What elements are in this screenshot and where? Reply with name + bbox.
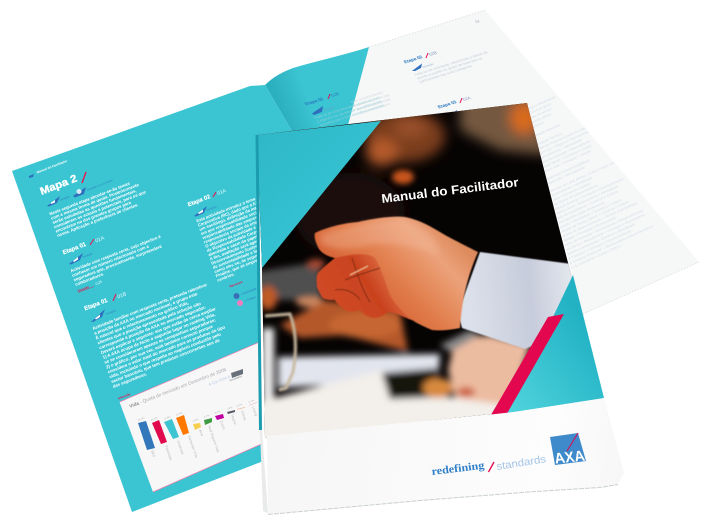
text block: step body continuing on white page: com os participantes	[350, 91, 384, 104]
logo: AXA	[550, 433, 586, 467]
text block: right column list on white page: Seguros Vida + Formação + Gestão	[540, 149, 592, 175]
text block: Etapa 01 01B body: vida, incluindo o que respeita ao negócio conduzido pelo	[109, 332, 222, 379]
heading: Etapa 02 01A: Etapa 02	[187, 194, 211, 208]
heading: Etapa 01 01B	[84, 291, 128, 322]
panel: cover shadow edge	[260, 430, 270, 514]
text block: right column list on white page: + Técnica Sénior	[527, 112, 552, 126]
resource icons	[229, 280, 257, 306]
text block: Etapa 02 01A body: Esta actividade introduz o tema da Etapa 01	[196, 187, 279, 223]
text block: step body continuing on white page: fundamentais de cada	[356, 97, 392, 111]
text block: Etapa 01 01B body: 1) A AXA ocupa de facto o segundo lugar no ranking Vida,	[102, 312, 216, 360]
resource icons: Recursos	[229, 280, 243, 288]
heading: Mapa 2: Mapa 2	[39, 173, 79, 198]
text block: Etapa 01 01B body: sector bancário, que tem produtos concorrentes aos da	[110, 337, 221, 384]
white base band	[267, 398, 624, 514]
text block: Etapa 02 01A body	[196, 187, 300, 283]
text block: right column list on white page: AXA "Universo" + Formação e Desenvolvimento	[564, 229, 632, 263]
cover bottom edge	[268, 484, 618, 514]
text block: Etapa 02 01A body: Desenvolvimento Sustentável	[211, 240, 267, 266]
page number: 12	[474, 19, 480, 24]
text block: right column list on white page: Gestão de Investimento + Comércio e Cultura	[553, 190, 618, 222]
heading: Etapa 01 01B: Duração	[105, 308, 117, 316]
red diagonal stripe	[491, 314, 564, 415]
text block: Etapa 01 01B body: Deverá explicar a seguinte: aos que estão de cerca ampliar	[100, 306, 217, 355]
teal triangle lower right	[507, 275, 604, 413]
tagline: redefining standards: standards	[496, 453, 547, 473]
step heading: Etapa 03 02A on white page: Etapa 03	[437, 99, 458, 109]
chart note: A Cor AXA é	[208, 374, 231, 387]
bar labels: Santander Vida	[187, 435, 199, 458]
text block: right column list on white page: Novidades de Serviço Sénior + Comércio e Cultura	[557, 200, 629, 236]
text block: step body on white page: Trata-se de actividade, relacionada a temas de	[413, 51, 489, 77]
icon row: duration and objective	[47, 178, 114, 206]
tagline: redefining standards: redefining	[431, 460, 486, 478]
photo: shirt cuff	[458, 252, 578, 349]
text block: Etapa 01 01B body: É natural que o relacionamento no gráfico Vida,	[95, 300, 189, 341]
step heading: Etapa 02 01B on teal page	[304, 91, 340, 115]
bar labels: Liberty	[251, 406, 258, 417]
text block: Etapa 01 01B body: a posição da AXA no mercado nacional, o grupo este	[93, 291, 198, 336]
text block: Etapa 01 01B body: 2) o gráfico, por sua vez, está também correcto porque	[105, 324, 214, 370]
heading: Etapa 02 01A: 01A	[217, 188, 228, 197]
text block: Etapa 02 01A body: um sociólogo, definição da marca	[199, 203, 264, 232]
chart note: Resultados	[229, 374, 243, 382]
text block: Mapa 2 intro	[49, 176, 150, 238]
text block: right column list on white page: Mobilidade + Formação e Recrutamento	[559, 216, 616, 245]
text block: Mapa 2 intro: serão estudadas as questões fundamentais,	[52, 188, 137, 225]
text block: Etapa 02 01A body: em que responsabilidade social	[200, 209, 261, 236]
photo: meeting with hand	[257, 103, 572, 438]
page: right white page	[348, 10, 699, 314]
icon row: duration and objective: Duração	[59, 194, 71, 202]
step heading: Etapa 02 01B on teal page: 01B	[330, 91, 340, 98]
teal corner panel	[257, 121, 381, 268]
resource icons: x Actividade	[240, 286, 257, 296]
text block: Etapa 02 01A body: como eles no, de seguro	[213, 252, 261, 274]
chart note	[208, 369, 243, 387]
text block: Mapa 2 intro: considerem os actuais e potenciais, para os que	[53, 189, 147, 229]
text block: right column list on white page: + Sinistros	[528, 120, 544, 131]
label: duration 0,25: Duração	[77, 285, 90, 293]
panel: market share chart	[120, 341, 266, 492]
bar chart: 4,1%	[203, 413, 210, 419]
step heading: Etapa 02 01B on teal page: Etapa 02	[304, 96, 325, 106]
text block: Etapa 02 01A body: de Responsabilidade Corporativa	[206, 224, 270, 253]
text block: Etapa 02 01A body: Corporativa (RC), dado que a AXA tem	[197, 195, 270, 228]
text block: Etapa 02 01A body: A fim, avaliação será agora	[209, 237, 261, 262]
text block: right column list on white page: Tomada Sénior + Comércio e Cultura	[539, 144, 592, 171]
step heading: Etapa 02 02B on white page: 02B	[428, 50, 438, 57]
bar labels: Mapfre	[230, 414, 237, 425]
text block: Etapa 01 01B body: se se considerarem apenas as companhias seguradoras;	[104, 317, 217, 365]
bar chart: 0,3%	[248, 398, 255, 404]
step heading: Etapa 03 02A on white page: 02A	[462, 95, 472, 102]
bar chart: 0,4%	[236, 402, 243, 408]
panel: front cover	[250, 90, 624, 514]
step heading: Etapa 03 02A on white page	[437, 95, 472, 122]
logo: AXA: AXA	[553, 448, 586, 467]
text block: step body on teal page: Trata-se de uma actividade conduzida com	[313, 96, 381, 120]
photo: hand	[315, 217, 478, 330]
text block: right column list on white page: Formação Avançada	[530, 123, 560, 140]
icon row: duration and objective: Duração xx a xx horas	[86, 178, 114, 192]
bar chart	[137, 398, 257, 450]
label: duration 0,25: 0,25	[95, 280, 103, 286]
bar labels: BES	[150, 450, 156, 458]
text block: Etapa 01 01B body: clientes que a posição apresentada pela solução não	[97, 301, 202, 345]
text block: right column list on white page: Comércio Geral + Recrutamento + Mentalidade	[552, 184, 619, 218]
text block: Etapa 02 01A body: responsáveis sociais da empresa	[203, 216, 267, 245]
text block: right column list on white page: Segmentos de Lares (Sénior, Jovens, Fatias, etc.)	[546, 160, 616, 195]
header mark: Manual do Facilitador	[36, 159, 68, 174]
text block: step body continuing on white page: segundo regras de jogo	[353, 93, 391, 107]
text block: right column list on white page: Técnica + Comércio e Cultura	[548, 182, 591, 204]
text block: right column list on white page	[529, 96, 652, 269]
bar labels: Real Seguros Vida	[207, 425, 220, 453]
text block: Etapa 01 01B body	[92, 281, 231, 389]
text block: right column list on white page: Ciclo do Assumento + Cama e Cultura	[566, 244, 621, 272]
label: duration 0,25	[77, 280, 103, 293]
bar chart: 3,5%	[214, 409, 221, 415]
page: open spread teal fold	[12, 47, 369, 512]
bar labels: Ocidental	[176, 440, 185, 455]
text block: right column list on white page: Formação Avançada + Recrutamento	[538, 139, 591, 166]
text block: Etapa 01 01A body: conhecer um número relacionado com a	[71, 243, 150, 278]
cover spine strip	[256, 135, 262, 430]
text block: right column list on white page: Profissionais + Recrutamento	[543, 165, 586, 188]
text block: step body continuing on white page: categoria de seguro	[358, 102, 391, 115]
text block: Mapa 2 intro: Nesta segunda etapa abordar-se-ão temas	[49, 181, 131, 216]
text block: right column list on white page: Sessões de Formação + Recrutamento e Desenvolvimento	[560, 208, 644, 249]
text block: Etapa 02 01A body: abordada e saem do papel	[208, 234, 258, 257]
text block: right column list on white page: Mapeamento e Responsabilidade	[542, 158, 590, 183]
text block: Etapa 02 01A body: cenários.	[216, 271, 235, 283]
bar chart: 14,8%	[163, 414, 172, 421]
step heading: Etapa 02 02B on white page: Duração	[421, 62, 435, 69]
text block: Etapa 02 01A body: Finalize, que as empresas	[215, 255, 265, 278]
bar chart: 4,9%	[192, 417, 199, 423]
text block: right column list on white page: Desenvolvimento + Mentalidade	[547, 176, 593, 200]
label: selection: Selecção	[118, 392, 131, 400]
bar chart: 25,0%	[137, 415, 146, 422]
bar labels: Zurich	[219, 420, 226, 430]
text block: Etapa 02 01A body: de sustentabilidade e ligação	[212, 244, 268, 270]
bar labels: Fidelidade	[164, 445, 173, 461]
text block: right column list on white page: Orientação Externa + Formação e Desenvolvimento	[550, 177, 624, 213]
text block: step body on teal page: conceitos que a AXA considera essenciais	[319, 104, 385, 127]
text block: Etapa 01 01B body: Actividade familiar com resposta certa, pretende relembrar	[92, 282, 208, 331]
text block: right column list on white page: Oferta Sénior de Desenvolvimento	[549, 183, 598, 209]
heading: Etapa 01 01A: 01A	[95, 235, 106, 244]
text block: right column list on white page: Expansão + Mentalidade + Comércio e Cultura	[555, 198, 622, 231]
step heading: Etapa 02 02B on white page	[403, 50, 438, 71]
text block: right column list on white page: Campanha Internacional + Comércio e Mentalidade	[563, 222, 636, 258]
heading: Etapa 01 01B: 01B	[117, 291, 128, 300]
text block: Etapa 02 01A body: responsabilidade das empresas	[202, 213, 263, 240]
heading: Etapa 02 01A: Duração	[206, 204, 218, 212]
bar chart: 13,5%	[175, 410, 184, 417]
text block: right column list on white page: Reparação Técnicos	[533, 131, 563, 148]
heading: Etapa 01 01A: Etapa 01	[62, 242, 88, 256]
bar labels: Outras	[240, 410, 247, 421]
text block: right column list on white page: Técnica e Mentalidade	[523, 95, 556, 113]
heading: Etapa 02 01A	[187, 188, 228, 216]
text block: Etapa 01 01B body: corresponde à posição da AXA no mercado segurador.	[98, 304, 206, 350]
text block: right column list on white page: Seguro Aut. + Seguro e Desenvolvimento	[535, 127, 594, 157]
bar labels: AXA	[198, 429, 204, 437]
heading: Mapa 2	[39, 172, 86, 198]
text block: Mapa 2 intro: com a mesma forma de quota. Posteriormente	[50, 182, 140, 221]
text block: step body on white page: participantes das suas categorias	[418, 64, 473, 84]
page: left teal page content	[29, 159, 300, 400]
text block: right column list on white page: Oferta Sénior + Recrutamento + Formação e Recrutamento	[561, 213, 646, 254]
text block: Etapa 01 01B body: considera o valor total do mercado para os produtos do tipo	[107, 324, 226, 375]
bar chart: 1,9%	[226, 405, 233, 411]
text block: step body on white page: acordo a quanto do grupo de base tem os	[416, 56, 484, 80]
heading: Etapa 01 01B: Etapa 01	[84, 298, 109, 312]
text block: Etapa 02 01A body: O objectivo da actividade é o	[205, 223, 260, 249]
text block: Etapa 01 01A body: seguradora que, provavelmente, surpreenderá	[73, 244, 163, 282]
step heading: Etapa 02 01B on teal page: Duração	[322, 105, 336, 112]
photo background blur	[255, 90, 548, 445]
title: Manual do Facilitador: Manual do Facilitador	[381, 175, 519, 206]
text block: right column list on white page: Gestão de serviço	[526, 107, 552, 122]
text block: right column list on white page: Posicionamento (visão Profissional)	[554, 201, 605, 227]
text block: right column list on white page: de Comércio geral	[524, 102, 551, 117]
text block: Etapa 01 01A body: Actividade com resposta certa, cujo objectivo é	[70, 234, 162, 273]
resource icons: x Cartaz	[244, 295, 257, 303]
text block: step body continuing on white page	[350, 89, 397, 115]
heading: Etapa 01 01A: Duração	[82, 251, 94, 259]
text block: step body on teal page: o objectivo de apresentar aos participantes	[316, 100, 383, 123]
text block: right column list on white page: Programa de Desenvolvimento + Técnica e Mentalidade	[558, 201, 637, 240]
heading: Etapa 01 01A	[62, 235, 106, 264]
step heading: Etapa 02 02B on white page: Etapa 02	[403, 54, 424, 64]
header mark	[29, 159, 68, 178]
text block: right column list on white page: Desenvolvimento + Mentalidade	[536, 138, 582, 162]
bar labels	[150, 406, 258, 461]
text block: Mapa 2 intro: encontram no dos grandes grupos para	[55, 200, 132, 234]
bar chart: 21,0%	[150, 415, 159, 422]
text block: right column list on white page: AXA "Universo Comercial" + Recrutamento e Reconhecimento	[565, 224, 653, 267]
text block: right column list on white page: Gestão de Projectos Comércio e Mentalidade	[534, 120, 599, 153]
text block: Etapa 01 01A body: colaboradores.	[74, 271, 105, 287]
text block: Etapa 01 01B body: das seguradoras.	[112, 371, 148, 389]
tagline: redefining standards	[431, 453, 547, 478]
chart title: Vida - Quota de mercado em Dezembro de 2006	[129, 367, 228, 410]
text block: Mapa 2 intro: nossa. Aplicação a preferência de clientes.	[56, 202, 139, 238]
